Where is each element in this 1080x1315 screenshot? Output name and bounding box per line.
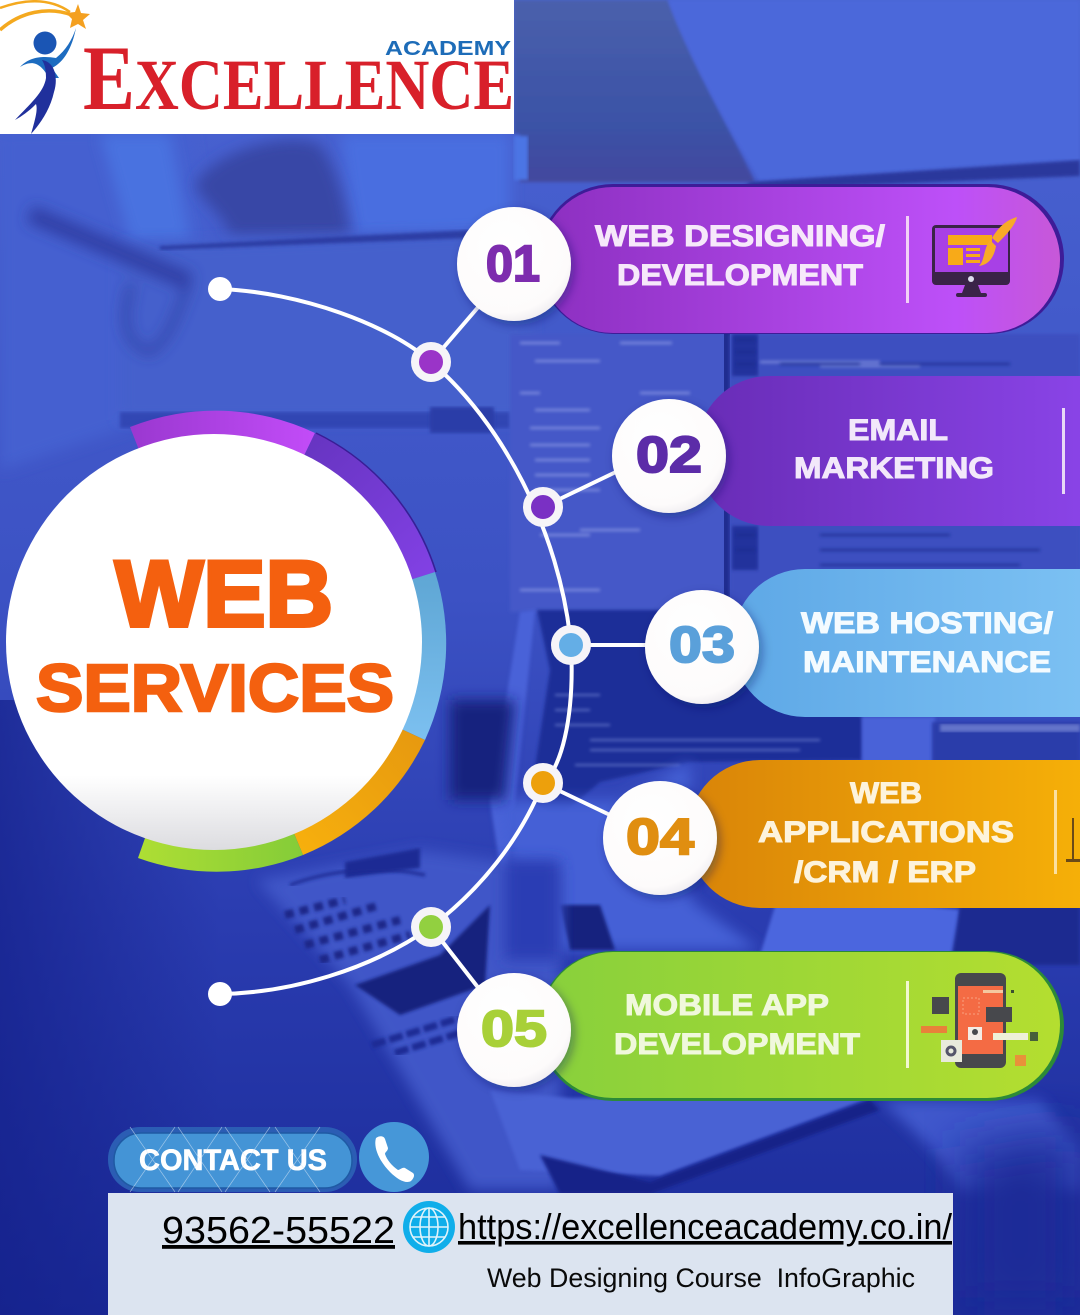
heading: WEB: WEB — [115, 541, 333, 646]
panel: 03 web hosting — [645, 569, 1080, 717]
panel: 04 web applications — [603, 760, 1080, 908]
icon: phone — [359, 1122, 429, 1192]
phone number: 93562-55522 — [162, 1210, 395, 1252]
panel: 02 email marketing: EMAIL — [848, 414, 948, 447]
label — [595, 220, 886, 292]
number ball: 04 — [626, 808, 695, 865]
curve end dots — [208, 277, 232, 1006]
number ball — [612, 399, 726, 513]
icon: shooting star and figure — [0, 1, 90, 134]
logo subword: ACADEMY — [385, 38, 512, 60]
website link: https://excellenceacademy.co.in/ — [458, 1206, 952, 1247]
panel: 03 web hosting: WEB HOSTING/ — [801, 607, 1054, 640]
panel: 02 email marketing — [612, 376, 1080, 526]
number ball: 03 — [669, 616, 735, 673]
contact us button — [108, 1127, 357, 1192]
panel: contact info — [108, 1193, 953, 1315]
panel: 01 web designing — [457, 184, 1064, 334]
panel: 05 mobile app: DEVELOPMENT — [614, 1028, 860, 1061]
panel: 04 web applications: WEB — [850, 777, 922, 810]
number ball: 01 — [486, 235, 540, 292]
logo panel — [0, 0, 514, 134]
panel: 04 web applications: APPLICATIONS — [758, 816, 1014, 849]
label: WEB DESIGNING/ — [595, 220, 886, 253]
panel: 04 web applications: /CRM / ERP — [794, 856, 976, 889]
panel: 03 web hosting: MAINTENANCE — [803, 646, 1051, 679]
contact us button: CONTACT US — [139, 1144, 327, 1177]
panel: 02 email marketing: MARKETING — [794, 452, 994, 485]
label: DEVELOPMENT — [617, 259, 863, 292]
number ball — [603, 781, 717, 895]
coloured ring — [130, 411, 446, 872]
number ball: 02 — [636, 426, 702, 483]
number ball: 05 — [481, 1000, 547, 1057]
heading: SERVICES: SERVICES — [36, 651, 394, 726]
icon: monitor with brush — [932, 217, 1017, 297]
connector curve — [220, 289, 650, 994]
logo wordmark: EXCELLENCE — [83, 27, 514, 129]
number ball — [457, 207, 571, 321]
number ball — [457, 973, 571, 1087]
number ball — [645, 590, 759, 704]
panel: 05 mobile app: MOBILE APP — [625, 989, 829, 1022]
icon: smartphone with app elements — [921, 973, 1038, 1068]
panel: web services circle — [6, 411, 446, 872]
caption: Web Designing Course InfoGraphic — [487, 1263, 915, 1293]
curve node dots — [415, 346, 587, 943]
panel: 05 mobile app — [457, 951, 1064, 1101]
icon: globe — [403, 1201, 455, 1253]
